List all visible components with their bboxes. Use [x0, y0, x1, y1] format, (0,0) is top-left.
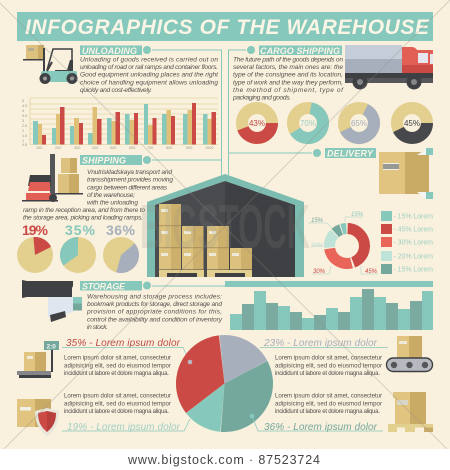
chart labels: donut percentages: 15%: [351, 212, 364, 218]
connector lines: [152, 50, 312, 175]
legend: - 15% Lorem: [394, 266, 433, 274]
text: lorem top right: Lorem ipsum dolor sit amet, consectetur: [275, 354, 382, 362]
heading: storage: STORAGE: [82, 282, 126, 292]
text: storage: [86, 294, 223, 331]
text: storage: provision of appropriate conditions for this,: [86, 308, 222, 316]
donut: 43%: 43%: [249, 119, 265, 128]
callout: 19%: [62, 419, 190, 433]
legend: [381, 211, 433, 274]
text: unloading: quickly and cost-effectively.: [80, 87, 152, 94]
heading: unloading: UNLOADING: [82, 46, 137, 56]
heading: storage: [80, 281, 225, 292]
text: lorem top right: [275, 354, 382, 377]
warehouse with stacked boxes: [147, 174, 304, 277]
pie: 36%: 36%: [106, 222, 136, 238]
callout: 35%: 35% - Lorem ipsum dolor: [66, 338, 181, 349]
text: unloading: Good equipment unloading places and the right: [80, 72, 219, 78]
text: shipping: of the warehouse;: [87, 192, 135, 199]
chart labels: donut percentages: [308, 212, 378, 275]
pie: 19%: 19%: [22, 222, 49, 238]
text: shipping: cargo between different areas: [87, 184, 168, 192]
text: lorem bottom right: incididunt ut labore et dolore magna aliqua.: [275, 408, 380, 415]
text: shipping: with the unloading: [87, 200, 138, 206]
legend: - 15% Lorem: [394, 214, 433, 220]
donut: 45%: [397, 108, 427, 138]
text: lorem bottom left: incididunt ut labore et dolore magna aliqua.: [64, 408, 169, 415]
histogram: [230, 289, 433, 330]
donut chart: delivery: [322, 221, 372, 271]
icon: pallet truck: [22, 154, 83, 202]
bar chart: 2: [22, 129, 24, 133]
footer: [0, 449, 450, 470]
heading: delivery: DELIVERY: [327, 148, 374, 158]
text: unloading: choice of handling equipment allows unloading: [80, 80, 218, 86]
icon: forklift with box: [23, 45, 78, 84]
bar chart: 400: [92, 146, 98, 150]
text: cargo shipping: [232, 56, 344, 102]
bar chart: 4: [22, 109, 24, 113]
footer: www.bigstock.com · 87523724: [127, 453, 320, 467]
icon: box with shield: [17, 399, 59, 436]
text: lorem top left: adipisicing elit, sed do eiusmod tempor: [64, 362, 171, 370]
bar chart: 100: [36, 146, 42, 150]
pie: 36%: [103, 222, 139, 273]
callout: 36%: 36% - Lorem ipsum dolor: [264, 422, 378, 433]
storage band: [225, 281, 433, 287]
bar chart: 4.5: [22, 104, 27, 108]
text: storage: Warehousing and storage process includes:: [87, 294, 222, 300]
icon: box on pallet: [388, 392, 433, 432]
text: lorem top left: [64, 354, 171, 377]
legend: - 20% Lorem: [394, 254, 433, 260]
title: INFOGRAPHICS OF THE WAREHOUSE: [25, 16, 430, 39]
callout: 23%: 23% - Lorem ipsum dolor: [263, 338, 378, 349]
icon: parcel on scale: 2:0: [46, 344, 56, 350]
donut: 43%: [242, 108, 272, 138]
pie leader dots: [188, 360, 254, 418]
chart labels: donut percentages: 30%: [313, 269, 326, 275]
text: shipping: Vnutriskladskaya transport and: [87, 169, 172, 176]
text: unloading: [80, 56, 219, 94]
text: shipping: transshipment provides moving: [87, 176, 173, 184]
bar chart: 3: [22, 119, 24, 123]
text: lorem top right: incididunt ut labore et dolore magna aliqua.: [275, 370, 380, 377]
bar chart: 300: [74, 146, 80, 150]
icon: delivery box with hands: [379, 148, 433, 199]
text: lorem bottom right: adipisicing elit, sed do eiusmod tempor: [275, 400, 382, 408]
bar chart: 900: [186, 146, 192, 150]
donut: 70%: [291, 106, 325, 140]
callout: 19%: 19% - Lorem ipsum dolor: [67, 422, 181, 433]
bar chart: 0.5: [22, 143, 27, 147]
icon: parcel on scale: [17, 341, 59, 378]
text: lorem bottom left: adipisicing elit, sed do eiusmod tempor: [64, 400, 171, 408]
bar chart: 600: [129, 146, 135, 150]
text: lorem bottom right: [275, 392, 382, 415]
pie: 35%: 35%: [65, 222, 96, 238]
text: unloading: unloading of road or rail ramps and container floors.: [80, 64, 218, 71]
text: lorem bottom right: Lorem ipsum dolor sit amet, consectetur: [275, 392, 382, 400]
chart labels: donut percentages: 15%: [311, 218, 324, 224]
bar chart: 2.5: [22, 124, 27, 128]
heading: cargo shipping: CARGO SHIPPING: [260, 46, 340, 56]
bar chart: 1: [22, 139, 24, 143]
text: storage: bookmark products for storage, direct storage and: [87, 301, 222, 308]
text: cargo shipping: packaging and goods.: [232, 94, 291, 102]
pie: 35%: [60, 222, 96, 273]
text: cargo shipping: the method of shipment, type of: [233, 87, 344, 94]
icon: security camera: [22, 280, 82, 322]
bar chart: 200: [55, 146, 61, 150]
legend: - 45% Lorem: [394, 226, 433, 234]
heading: delivery: [312, 148, 376, 158]
bar chart: 5: [22, 99, 24, 103]
icon: truck: [345, 45, 433, 90]
chart labels: donut percentages: 45%: [365, 269, 378, 275]
text: lorem bottom left: Lorem ipsum dolor sit amet, consectetur: [64, 392, 171, 400]
text: unloading: Unloading of goods received is carried out on: [80, 56, 218, 64]
chart labels: donut percentages: 20%: [310, 243, 324, 249]
text: shipping: the storage area, picking and loading ramps.: [23, 214, 143, 222]
text: lorem top right: adipisicing elit, sed do eiusmod tempor: [275, 362, 382, 370]
legend: - 30% Lorem: [394, 240, 433, 246]
bar chart: 1000: [205, 146, 213, 150]
pie: 19%: [17, 222, 53, 273]
text: lorem top left: incididunt ut labore et dolore magna aliqua.: [64, 370, 169, 377]
donut: 70%: 70%: [300, 119, 316, 128]
text: cargo shipping: type of work and the way they perform,: [233, 80, 343, 86]
bar chart: 800: [166, 146, 172, 150]
text: lorem bottom left: [64, 392, 171, 415]
pie chart: large: [191, 350, 258, 417]
bar chart: 1.5: [22, 134, 27, 138]
text: shipping: [23, 169, 173, 222]
text: lorem top left: Lorem ipsum dolor sit amet, consectetur: [64, 354, 171, 362]
text: cargo shipping: several factors, the main ones are: the: [233, 64, 343, 71]
donut: 65%: 65%: [351, 119, 367, 128]
bar chart: 3.5: [22, 114, 27, 118]
bar chart: 500: [110, 146, 116, 150]
icon: box on conveyor: [386, 336, 432, 372]
text: cargo shipping: type of the consignee and its location,: [233, 72, 343, 78]
heading: shipping: SHIPPING: [82, 156, 126, 166]
text: storage: in stock.: [87, 324, 108, 331]
bar chart: 700: [147, 146, 153, 150]
callout: 35%: [62, 338, 190, 362]
bar chart: [22, 98, 218, 150]
text: storage: control the availability and condition of inventory: [87, 316, 223, 324]
callout: 36%: [252, 416, 383, 433]
text: shipping: ramp in the reception area, and from there to: [23, 207, 145, 214]
text: cargo shipping: The future path of the goods depends on: [233, 56, 343, 64]
heading: shipping: [80, 155, 152, 166]
donut: 45%: 45%: [404, 119, 420, 128]
donut: 65%: [339, 103, 379, 143]
